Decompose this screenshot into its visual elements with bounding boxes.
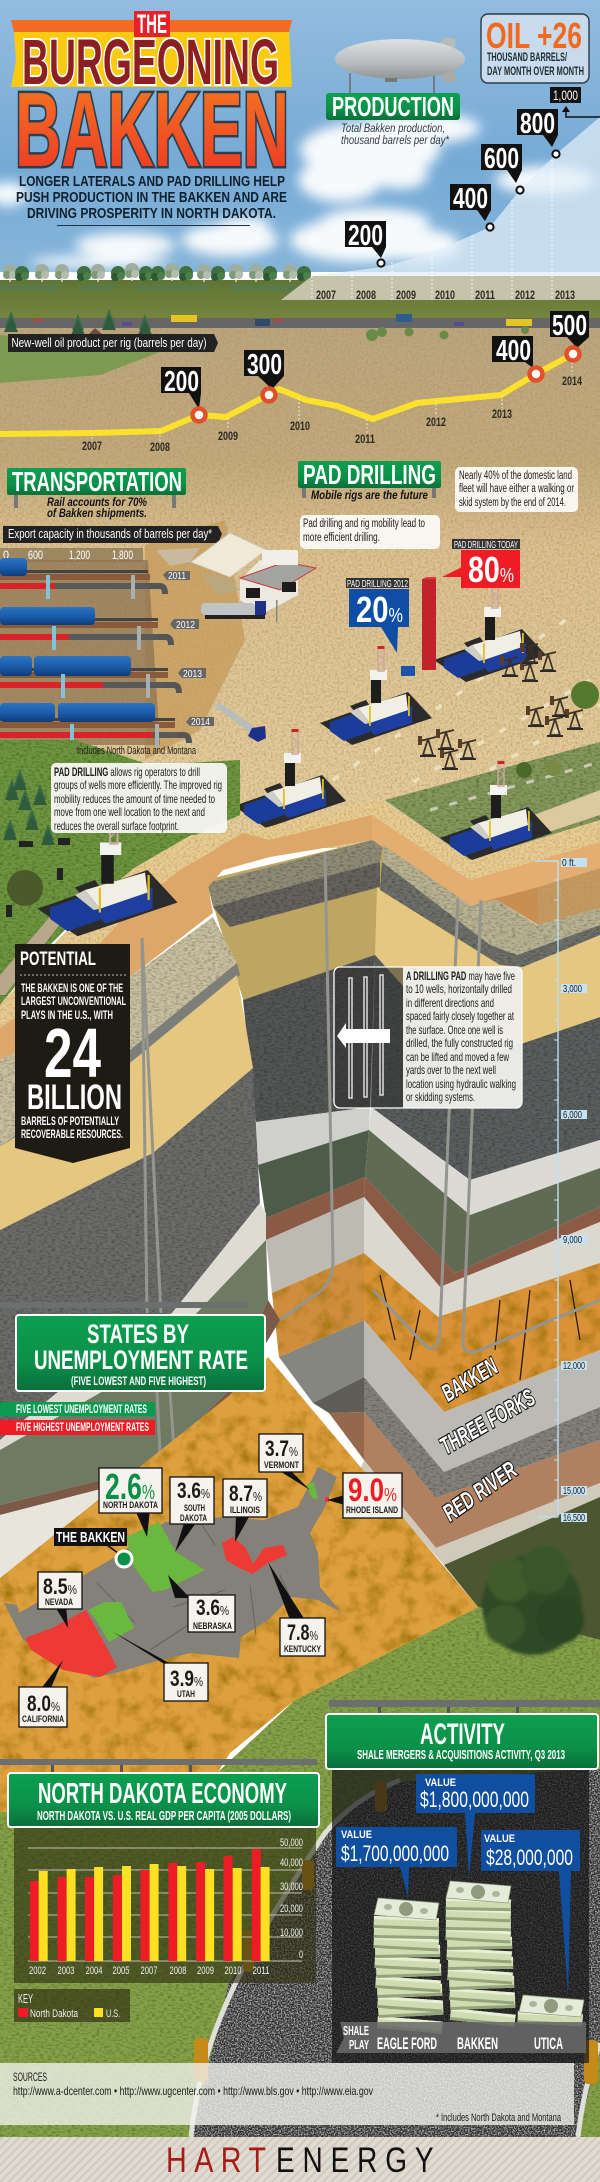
chart key: U.S. [106,2008,120,2020]
callout text: A DRILLING PAD may have five [406,969,515,983]
callout: Illinois [223,1479,267,1517]
money stack: Bakken [445,1881,516,2027]
callout: Vermont: VERMONT [264,1460,299,1471]
highway [0,314,600,328]
tile dashes [333,617,600,782]
formation labels [436,1353,540,1527]
shale play labels [336,2022,586,2053]
callout text [406,969,516,1104]
callout: Utah [164,1663,208,1701]
value callout: Utica: VALUE [484,1833,515,1845]
potential panel: RECOVERABLE RESOURCES. [21,1127,123,1141]
transportation subtitle [47,495,147,520]
right block strata [243,800,600,1565]
line chart callouts [161,310,589,422]
hart energy footer: HART [166,2140,266,2180]
rail and pipeline chart [0,548,214,748]
high unemployment states [25,1497,329,1677]
sources [0,2063,574,2125]
arrow [337,1023,390,1048]
production chart [281,117,600,302]
states by unemployment rate sign: UNEMPLOYMENT RATE [34,1345,248,1375]
pad drilling text box: groups of wells more efficiently. The improved rig [54,778,222,792]
potential panel: 24 [44,1014,101,1092]
shale play labels: PLAY [349,2037,369,2052]
export capacity label [3,526,222,543]
unemployment legend: FIVE LOWEST UNEMPLOYMENT RATES [16,1404,147,1416]
potential panel: POTENTIAL [20,949,96,970]
callout text: yards over to the next well [406,1063,496,1077]
shale play labels: BAKKEN [457,2034,498,2053]
production subtitle: thousand barrels per day* [341,135,449,147]
the bakken marker [54,1528,132,1567]
money stack: Utica [517,1995,584,2026]
airship [335,37,465,95]
axis labels [3,548,133,562]
chart key: North Dakota [30,2008,79,2020]
axis labels: 1,800 [112,548,133,562]
callout: Utah: UTAH [177,1689,195,1700]
low unemployment states [88,1482,318,1642]
line chart years: 2009 [218,429,238,443]
unemployment legend: FIVE HIGHEST UNEMPLOYMENT RATES [16,1422,149,1434]
production value callouts [345,87,600,267]
pad drilling 20 percent bar: PAD DRILLING 2012 [347,579,408,590]
wells diagram [349,975,383,1098]
x axis labels: 2007 [140,1965,158,1977]
depth scale [535,858,587,1524]
y axis labels [280,1837,303,1961]
potential panel: THE BAKKEN IS ONE OF THE [21,981,123,995]
pad drilling 80 percent bar: 80% [468,549,514,590]
title: THE [137,9,167,39]
y axis labels: 20,000 [280,1903,303,1915]
callout: California: CALIFORNIA [22,1714,64,1725]
chart key: KEY [18,1991,33,2006]
year 2012 row: 2012 [176,620,195,631]
production years: 2013 [555,288,575,302]
production value callouts: 200 [348,220,383,252]
line chart callouts: 300 [247,349,282,381]
chart key [14,1989,130,2022]
potential panel: LARGEST UNCONVENTIONAL [21,994,126,1008]
value callout: Eagle Ford [336,1827,457,1897]
transportation sign [7,466,186,508]
green surface, left [0,681,600,1005]
activity sign: ACTIVITY [420,1718,505,1751]
unemployment legend [0,1402,155,1435]
pad drilling 80 percent bar: PAD DRILLING TODAY [454,540,518,551]
export capacity label: Export capacity in thousands of barrels per day* [8,527,212,541]
value callout: Bakken [416,1774,535,1878]
year 2011 row: 2011 [168,571,186,582]
callout: Nevada: 8.5% [43,1574,77,1599]
callout text: spaced fairly closely together at [406,1009,514,1023]
pad drilling text box: PAD DRILLING allows rig operators to drill [54,765,200,779]
callout: Nevada [38,1572,82,1609]
callout: Rhode Island [343,1472,402,1518]
production years [316,288,575,302]
callout: Nebraska: 3.6% [196,1595,229,1620]
value callout: Bakken: $1,800,000,000 [420,1787,529,1812]
pad drilling text box [51,763,227,833]
line chart years [82,374,582,454]
production value callouts: 400 [453,183,488,215]
the bakken marker: THE BAKKEN [56,1529,125,1546]
pad drilling 80 percent bar [422,539,520,670]
drilling pad callout [334,967,522,1108]
x axis labels: 2004 [86,1965,102,1977]
formation labels: THREE FORKS [436,1384,540,1460]
transportation subtitle: Rail accounts for 70% [47,495,147,509]
text box: efficient drilling: more efficient drilling. [303,532,380,544]
y axis labels: 30,000 [280,1881,303,1893]
includes note: Includes North Dakota and Montana [77,745,197,757]
pad drilling 20 percent bar [346,578,415,676]
remaining rigs [38,761,552,936]
callout: Rhode Island: 9.0% [348,1472,397,1508]
potential panel: PLAYS IN THE U.S., WITH [21,1008,113,1022]
north dakota economy sign: NORTH DAKOTA ECONOMY [38,1778,287,1810]
subtitle: LONGER LATERALS AND PAD DRILLING HELP [19,174,285,190]
north dakota economy sign: NORTH DAKOTA VS. U.S. REAL GDP PER CAPITA (2005 DOLLARS) [37,1808,291,1823]
hart energy footer: ENERGY [276,2140,434,2180]
states by unemployment rate sign [0,1302,265,1391]
pad drilling sign [298,459,441,498]
callout: Nevada: NEVADA [45,1597,73,1608]
line chart label: New-well oil product per rig (barrels per day) [12,336,206,350]
road [191,1769,600,2137]
callout: Kentucky [280,1618,325,1656]
year 2013 row: 2013 [183,669,202,680]
pad drilling text box: mobility reduces the amount of time needed to [54,792,215,806]
callout: Vermont [259,1434,303,1472]
depth scale: 3,000 [563,984,582,995]
year 2014 row [0,703,214,748]
callout: North Dakota: 2.6% [105,1466,155,1507]
y axis labels: 10,000 [280,1927,303,1939]
pumpjacks [418,643,583,770]
left block strata [0,815,372,1578]
line chart years: 2014 [562,374,582,388]
year 2013 row [0,656,206,698]
production sign [326,91,460,122]
callout: California [19,1687,67,1727]
axis labels: 0 [3,548,9,562]
production years: 2008 [356,288,376,302]
production years: 2012 [515,288,535,302]
depth scale: 15,000 [563,1486,585,1497]
production sign: PRODUCTION [332,91,454,122]
callout text: location using hydraulic walking [406,1077,516,1091]
well productivity line chart [0,354,582,454]
callout text: to 10 wells, horizontally drilled [406,982,512,996]
x axis labels: 2010 [224,1965,242,1977]
x axis labels: 2005 [112,1965,130,1977]
potential panel [15,944,130,1163]
x axis labels: 2009 [197,1965,214,1977]
x axis labels: 2002 [29,1965,46,1977]
callout text: or skidding systems. [406,1090,475,1104]
line chart years: 2010 [290,419,310,433]
axis labels: 600 [28,548,43,562]
production years: 2011 [475,288,495,302]
y axis labels: 0 [299,1949,303,1961]
y axis labels: 40,000 [280,1857,303,1869]
production years: 2009 [396,288,416,302]
transportation sign: TRANSPORTATION [12,466,182,497]
callout: Vermont: 3.7% [265,1436,298,1461]
subtitle: DRIVING PROSPERITY IN NORTH DAKOTA. [27,206,276,222]
production years: 2007 [316,288,336,302]
title: BURGEONING [22,26,279,98]
callout: Nebraska: NEBRASKA [193,1621,232,1632]
line chart years: 2007 [82,439,102,453]
sky background [0,0,600,272]
states by unemployment rate sign: (FIVE LOWEST AND FIVE HIGHEST) [71,1374,206,1388]
lower grass [0,1497,600,2137]
value callout: Eagle Ford: VALUE [341,1829,372,1841]
year 2011 row [0,558,190,599]
line chart callouts: 500 [552,310,587,342]
transportation subtitle: of Bakken shipments. [47,506,147,520]
callout: Kentucky: 7.8% [287,1620,318,1645]
line chart label [8,334,218,352]
line chart callouts: 200 [164,366,199,398]
callout: Rhode Island: RHODE ISLAND [346,1505,398,1516]
x axis labels: 2008 [170,1965,186,1977]
axis labels: 1,200 [69,548,90,562]
shale play labels: EAGLE FORD [377,2034,437,2053]
callout: California: 8.0% [27,1691,60,1716]
callout: Nebraska [188,1595,235,1632]
activity sign [326,1700,600,1769]
depth scale: 12,000 [563,1361,585,1372]
x axis labels: 2011 [252,1965,270,1977]
pad drilling sign: PAD DRILLING [303,459,436,490]
inner shaft strata [205,840,383,1460]
pad drilling subtitle: Mobile rigs are the future [311,488,428,502]
formation labels: RED RIVER [438,1456,523,1527]
sources: SOURCES [13,2070,47,2084]
subtitle [16,174,287,222]
text box: efficient drilling [300,515,440,549]
callout text: the surface. Once one well is [406,1023,503,1037]
value callout: Utica [481,1830,580,1995]
depth scale: 6,000 [563,1110,582,1121]
value callout: Eagle Ford: $1,700,000,000 [341,1841,449,1866]
y axis labels: 50,000 [280,1837,303,1849]
us bars [39,1864,270,1961]
north dakota economy sign [0,1759,319,1827]
subtitle: PUSH PRODUCTION IN THE BAKKEN AND ARE [16,190,287,206]
callout text: drilled, the fully constructed rig [406,1036,513,1050]
callout text: in different directions and [406,996,494,1010]
ground [0,309,600,848]
depth scale: 9,000 [563,1235,582,1246]
callout: Illinois: ILLINOIS [230,1505,260,1516]
production years: 2010 [435,288,455,302]
hart energy footer [0,2137,600,2182]
x axis labels: 2003 [58,1965,74,1977]
activity panel backdrop [332,1769,589,2063]
x axis labels [29,1965,270,1977]
year 2012 row [0,607,199,650]
states by unemployment rate sign: STATES BY [87,1319,189,1349]
callout text: can be lifted and moved a few [406,1050,509,1064]
gas station buildings [156,533,316,622]
callout: North Dakota: NORTH DAKOTA [103,1500,158,1511]
gdp bar chart [14,1828,316,1983]
callout: South Dakota: DAKOTA [180,1513,207,1524]
depth scale: 0 ft. [562,858,576,869]
callout: Utah: 3.9% [170,1666,203,1691]
treeline and grass field [0,263,600,318]
orange map ground [0,1357,478,1812]
sources: http://www.a-dcenter.com • http://www.ugcenter.com • http://www.bls.gov • http://www.eia.gov [13,2084,373,2098]
north dakota bars [30,1849,261,1961]
drilling rigs [234,583,546,828]
map callouts [40,1470,345,1690]
callout: South Dakota: SOUTH [184,1503,205,1514]
value callout: Bakken: VALUE [425,1777,456,1789]
line chart years: 2013 [492,407,512,421]
potential panel: BILLION [27,1078,122,1117]
money stack: Eagle Ford [373,1898,444,2034]
text box: domestic land fleet [455,467,578,512]
year 2014 row: 2014 [191,717,210,728]
shale play labels: SHALE [343,2023,369,2038]
production value callouts: 800 [520,108,555,140]
callout: Kentucky: KENTUCKY [284,1644,321,1655]
pad drilling text box: reduces the overall surface footprint. [54,819,179,833]
pad drilling text box: move from one well location to the next and [54,805,205,819]
oil +26 callout [481,14,589,83]
well pipes [142,853,600,1513]
title [11,9,292,189]
formation labels: BAKKEN [437,1353,503,1407]
production subtitle [341,123,449,147]
callout: Illinois: 8.7% [229,1481,262,1506]
title: BAKKEN [15,71,289,189]
depth scale: 16,500 [563,1513,585,1524]
line chart years: 2008 [150,440,170,454]
shale play labels: UTICA [534,2034,563,2053]
tanker trucks [201,601,266,790]
callout: South Dakota [170,1477,214,1524]
US map [4,1467,341,1678]
production subtitle: Total Bakken production, [341,123,445,135]
potential panel: BARRELS OF POTENTIALLY [21,1114,119,1128]
line chart years: 2011 [355,432,375,446]
line chart callouts: 400 [496,335,531,367]
callout: South Dakota: 3.6% [177,1478,210,1503]
tree [482,1546,584,1655]
text box: efficient drilling: Pad drilling and rig mobility lead to [303,518,425,530]
pad drilling 20 percent bar: 20% [356,589,403,630]
production value callouts: 1,000 [553,87,578,103]
line chart years: 2012 [426,415,446,429]
production value callouts: 600 [484,143,519,175]
